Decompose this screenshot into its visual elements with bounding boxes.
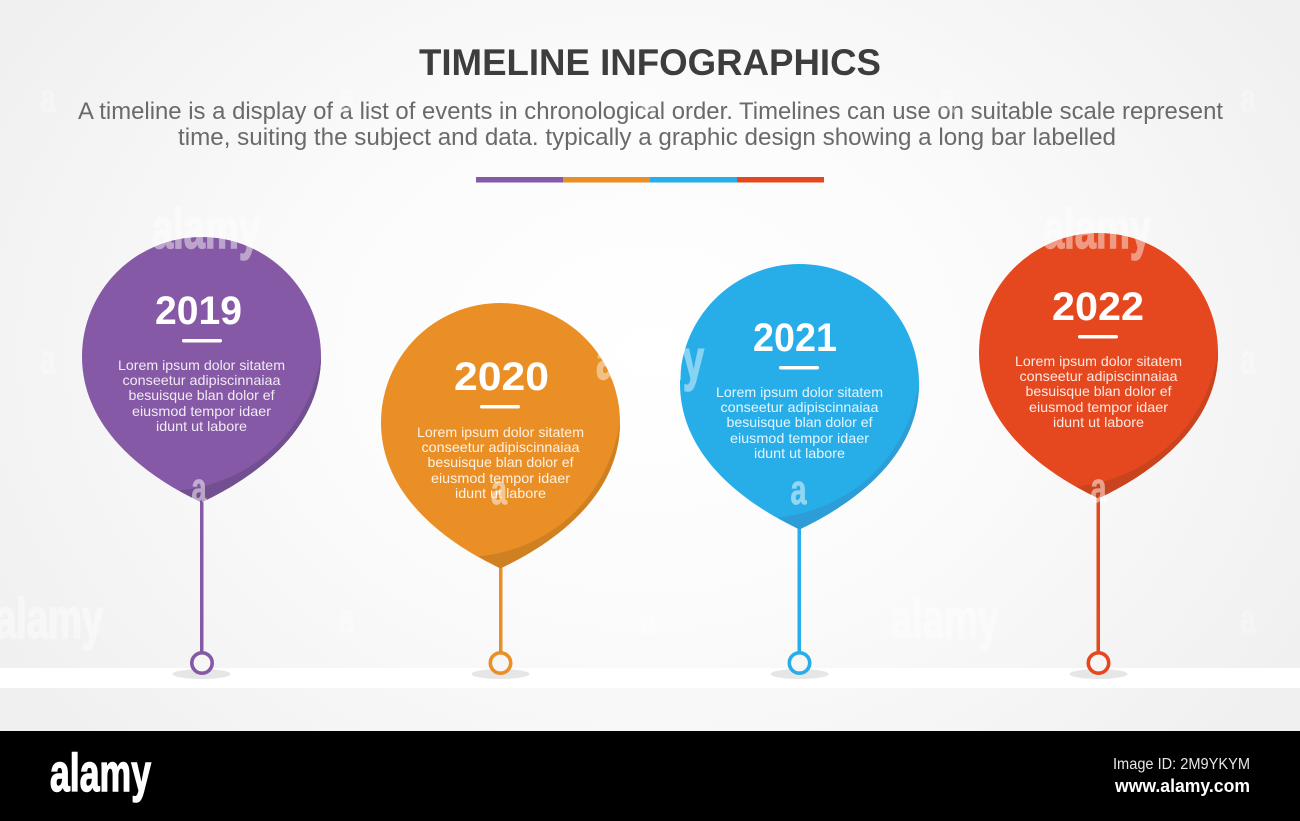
pin: 2019: [82, 237, 321, 679]
footer logo: alamy: [50, 744, 151, 803]
body text 2022: conseetur adipiscinnaiaa: [1020, 368, 1178, 384]
image id: Image ID: 2M9YKYM: [1113, 756, 1250, 773]
intro paragraph: A timeline is a display of a list of events in chronological order. Timelines can use on suitable scale represent: [78, 98, 1223, 125]
watermarks: a: [1090, 464, 1107, 511]
body text 2022: besuisque blan dolor ef: [1026, 383, 1172, 399]
watermarks: [0, 74, 1256, 651]
body text 2021: besuisque blan dolor ef: [726, 414, 873, 430]
stem and marker 2019: [172, 498, 230, 679]
watermarks: a: [40, 74, 56, 121]
watermarks: alamy: [596, 328, 704, 392]
body text 2020: besuisque blan dolor ef: [428, 454, 574, 470]
body text 2022: Lorem ipsum dolor sitatem: [1015, 353, 1182, 369]
website: www.alamy.com: [1114, 776, 1250, 796]
watermarks: a: [192, 464, 207, 511]
body text 2022: [1015, 353, 1182, 430]
intro paragraph: [78, 98, 1223, 151]
timeline baseline band: [0, 668, 1300, 688]
watermarks: a: [640, 74, 656, 121]
body text 2020: conseetur adipiscinnaiaa: [422, 439, 580, 455]
body text 2019: eiusmod tempor idaer: [132, 403, 271, 419]
balloon 2020: [381, 303, 620, 568]
intro paragraph: time, suiting the subject and data. typically a graphic design showing a long bar labelled: [178, 124, 1116, 151]
watermarks: a: [1240, 335, 1256, 382]
balloon 2022: [979, 233, 1218, 498]
body text 2019: besuisque blan dolor ef: [128, 387, 275, 403]
watermarks: a: [491, 466, 507, 513]
balloon 2021: [680, 264, 919, 530]
stem and marker 2020: [472, 564, 530, 679]
body text 2021: [716, 384, 883, 461]
balloon 2019: [82, 237, 321, 502]
divider 2022: [1078, 335, 1118, 338]
year 2019: 2019: [155, 289, 242, 333]
body text 2020: Lorem ipsum dolor sitatem: [417, 424, 584, 440]
year 2020: 2020: [454, 355, 549, 399]
watermarks: a: [40, 335, 56, 382]
body text 2021: idunt ut labore: [754, 445, 845, 461]
year 2022: 2022: [1052, 285, 1144, 329]
watermarks: alamy: [152, 197, 260, 261]
stem and marker 2021: [770, 525, 828, 679]
pin: 2021: [680, 264, 919, 679]
stem and marker 2022: [1070, 494, 1128, 679]
body text 2019: Lorem ipsum dolor sitatem: [118, 357, 285, 373]
watermarks: a: [640, 595, 656, 642]
pin: 2020: [381, 303, 620, 679]
divider 2019: [182, 339, 222, 342]
body text 2019: conseetur adipiscinnaiaa: [122, 372, 281, 388]
divider 2021: [779, 366, 819, 370]
year 2021: 2021: [753, 316, 837, 360]
watermarks: a: [790, 466, 807, 513]
watermarks: a: [1240, 74, 1256, 121]
body text 2020: idunt ut labore: [455, 485, 546, 501]
watermarks: a: [340, 74, 355, 121]
pin: 2022: [979, 233, 1218, 679]
body text 2019: [118, 357, 285, 434]
body text 2019: idunt ut labore: [156, 418, 247, 434]
colour divider: [476, 177, 824, 182]
body text 2021: Lorem ipsum dolor sitatem: [716, 384, 883, 400]
title: TIMELINE INFOGRAPHICS: [419, 42, 881, 83]
body text 2020: eiusmod tempor idaer: [431, 470, 570, 486]
watermarks: a: [940, 335, 955, 382]
divider 2020: [480, 405, 520, 408]
body text 2022: idunt ut labore: [1053, 414, 1144, 430]
watermarks: a: [340, 595, 355, 642]
body text 2021: eiusmod tempor idaer: [730, 430, 869, 446]
watermarks: alamy: [1043, 197, 1151, 261]
watermarks: alamy: [891, 587, 999, 651]
watermarks: a: [1240, 595, 1256, 642]
body text 2020: [417, 424, 584, 501]
footer bar: [0, 731, 1300, 821]
body text 2021: conseetur adipiscinnaiaa: [720, 399, 879, 415]
body text 2022: eiusmod tempor idaer: [1029, 399, 1168, 415]
watermarks: a: [940, 74, 955, 121]
